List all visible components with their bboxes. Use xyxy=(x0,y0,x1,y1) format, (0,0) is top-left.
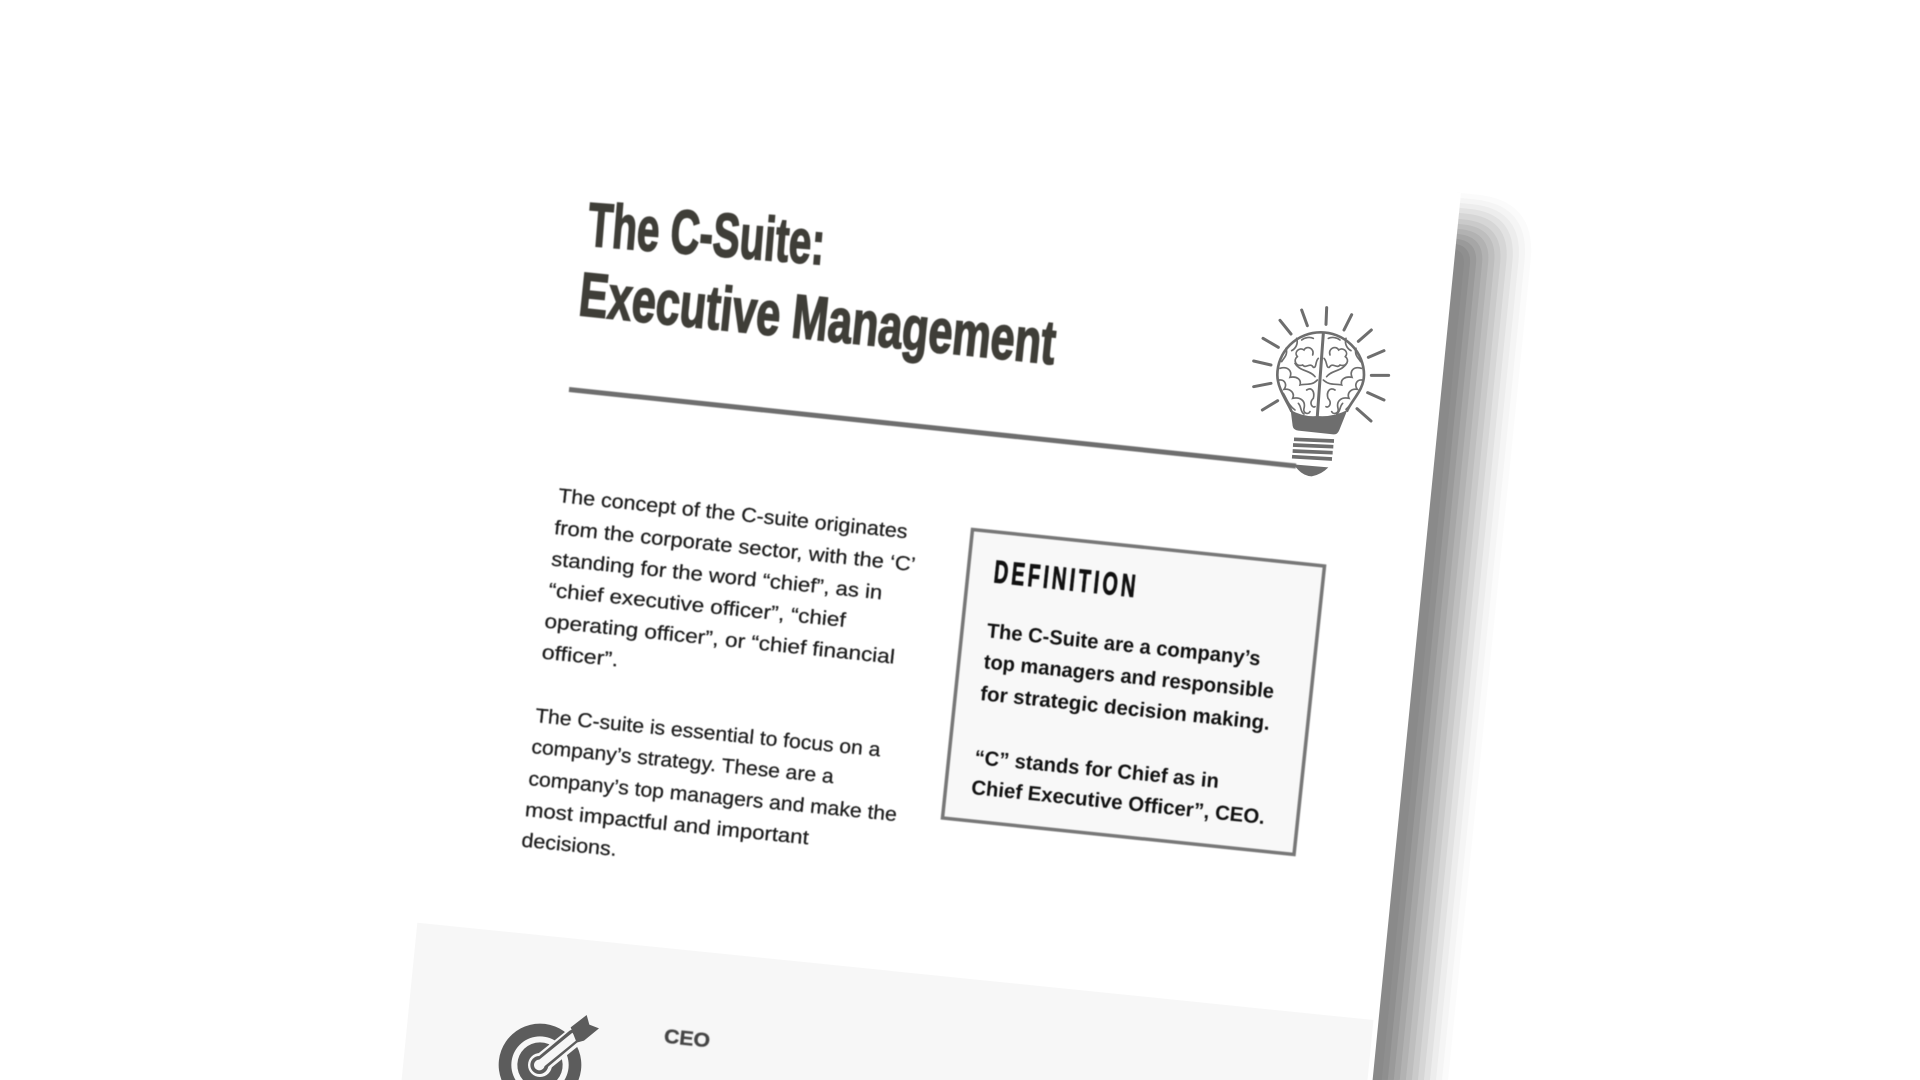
bulb rays xyxy=(1254,308,1389,421)
intro paragraph 1: “chief executive officer”, “chief xyxy=(547,580,847,632)
title: Executive Management xyxy=(576,260,1059,378)
definition text: for strategic decision making. xyxy=(979,682,1271,735)
intro paragraph 2: company’s strategy. These are a xyxy=(531,736,836,788)
panel: definition xyxy=(942,530,1324,854)
intro paragraph 2: decisions. xyxy=(521,830,618,861)
intro paragraph 1: from the corporate sector, with the ‘C’ xyxy=(553,517,917,576)
page shadow xyxy=(1367,192,1537,1080)
title: The C-Suite: xyxy=(585,191,828,279)
definition heading: DEFINITION xyxy=(992,554,1137,604)
intro paragraph 1: officer”. xyxy=(541,642,620,671)
definition text: “C” stands for Chief as in xyxy=(974,746,1220,793)
definition text: top managers and responsible xyxy=(983,650,1275,703)
panel background xyxy=(402,923,1374,1080)
brain xyxy=(1279,333,1362,416)
page sheet xyxy=(1340,190,1461,1080)
bulb screw xyxy=(1292,439,1334,459)
title xyxy=(576,191,1059,378)
intro paragraph 1 xyxy=(541,485,917,671)
definition text xyxy=(970,619,1275,829)
definition box xyxy=(942,530,1324,854)
CEO label: CEO xyxy=(663,1026,711,1052)
bulb tip xyxy=(1293,464,1328,476)
intro paragraph 2: The C-suite is essential to focus on a xyxy=(534,705,882,762)
icon: target with arrow xyxy=(499,1015,599,1080)
definition text: The C-Suite are a company’s xyxy=(986,619,1262,671)
icon: light bulb with brain xyxy=(1254,308,1389,476)
bulb base xyxy=(1291,410,1347,434)
bulb outline xyxy=(1277,332,1364,412)
intro paragraph 1: operating officer”, or “chief financial xyxy=(543,611,896,669)
definition text: Chief Executive Officer”, CEO. xyxy=(970,776,1266,829)
intro paragraph 1: standing for the word “chief”, as in xyxy=(550,549,883,604)
intro paragraph 2: most impactful and important xyxy=(524,799,810,849)
intro paragraph 2 xyxy=(521,705,898,861)
intro paragraph 2: company’s top managers and make the xyxy=(528,768,898,826)
panel: CEO row xyxy=(402,923,1374,1080)
title rule xyxy=(569,390,1296,466)
intro paragraph 1: The concept of the C-suite originates xyxy=(557,485,909,543)
